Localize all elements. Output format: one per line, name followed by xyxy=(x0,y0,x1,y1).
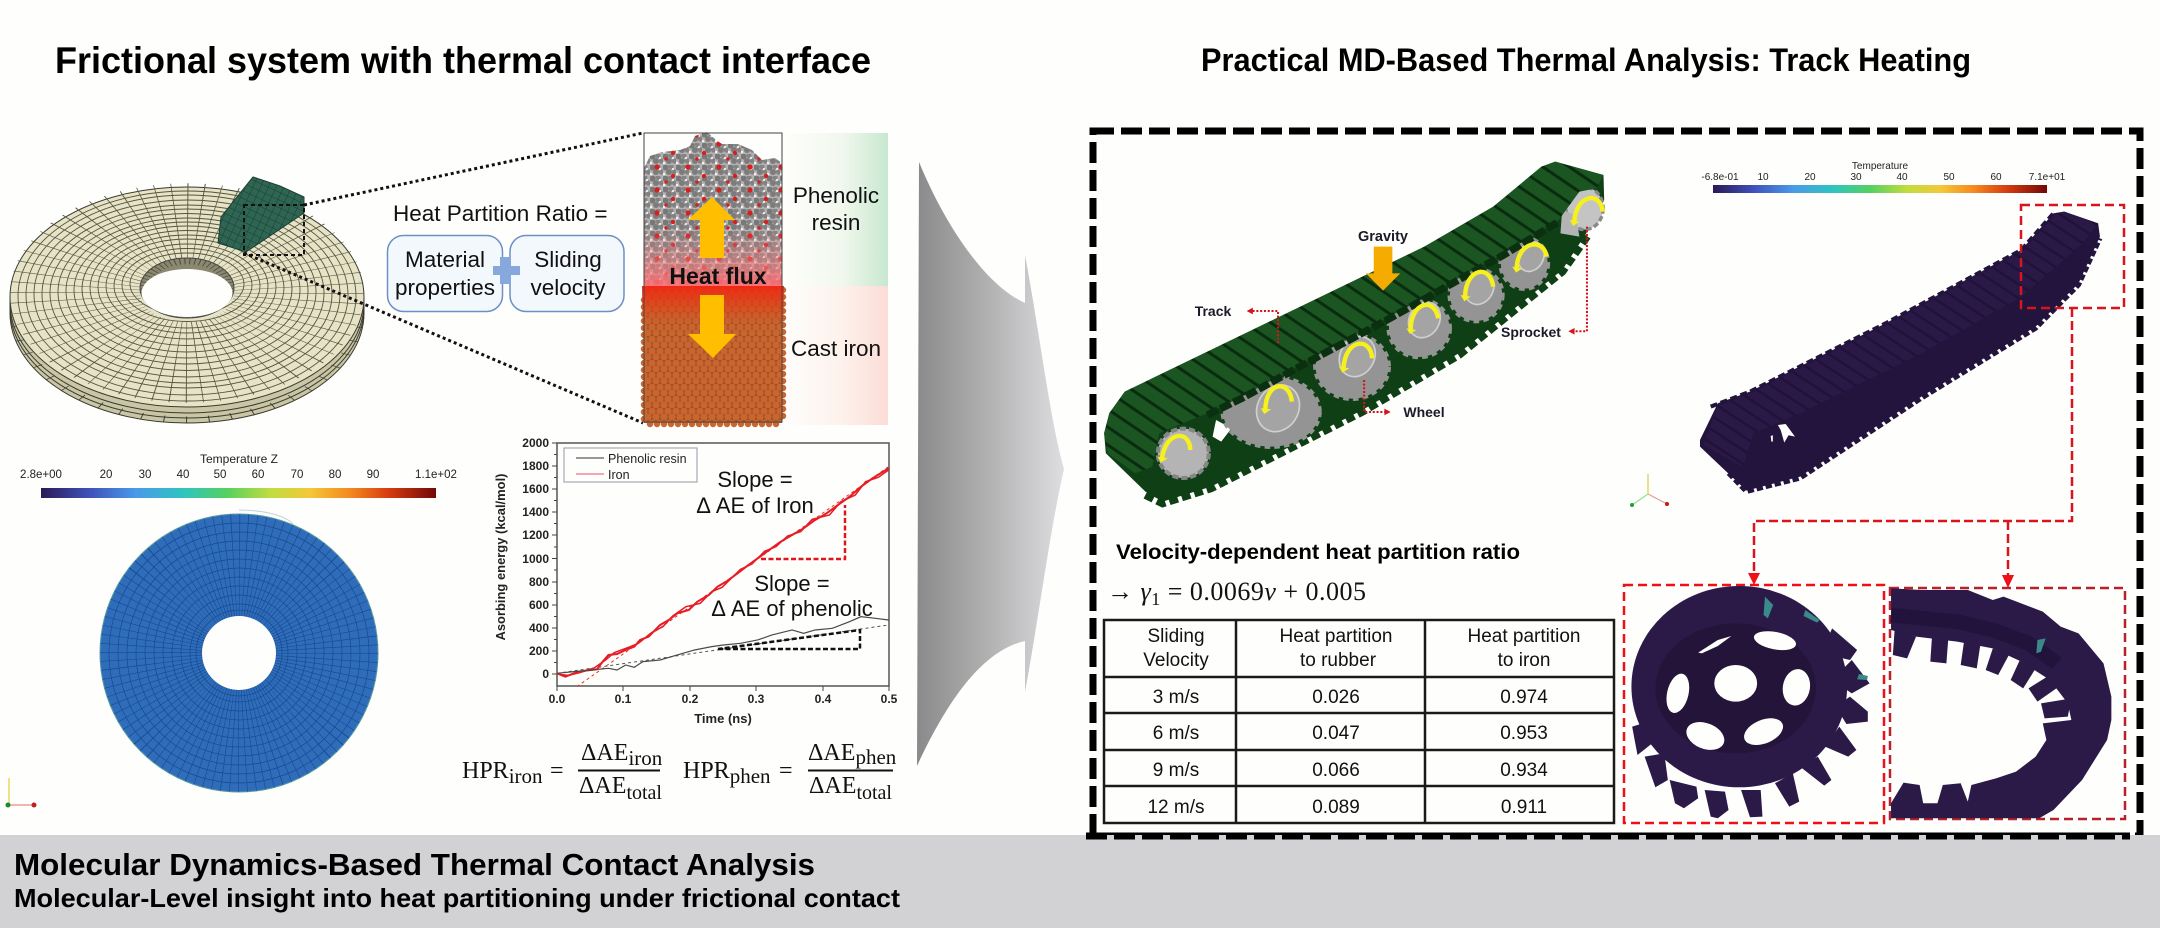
temperature colour bar: 30 xyxy=(1850,172,1862,183)
row: 9 m/s xyxy=(1153,760,1548,781)
y axis labels: 0 xyxy=(542,667,549,681)
panel: track CAD model xyxy=(1104,162,1604,503)
row: 3 m/s: 0.026 xyxy=(1312,687,1360,708)
y axis labels: 1400 xyxy=(522,505,549,519)
heat partition ratio formula xyxy=(388,201,624,312)
colour bar: 20 xyxy=(100,469,112,481)
box: sliding velocity xyxy=(510,236,624,312)
x axis labels: 0.4 xyxy=(815,692,832,706)
panel: track temperature model xyxy=(1630,161,2124,588)
HPR iron: total xyxy=(626,782,662,804)
HPR iron: iron xyxy=(509,764,543,788)
legend: Phenolic resin xyxy=(608,452,687,466)
up arrow xyxy=(688,197,735,258)
colour bar: 90 xyxy=(367,469,379,481)
down arrow xyxy=(688,295,736,358)
HPR phen: total xyxy=(856,782,892,804)
equation: gamma: v + 0.005 xyxy=(1264,577,1366,606)
slope label: iron: Δ AE of Iron xyxy=(696,493,814,518)
y axis title: Asorbing energy (kcal/mol) xyxy=(494,474,508,640)
row: 6 m/s: 6 m/s xyxy=(1153,723,1199,744)
colour bar: 50 xyxy=(214,469,226,481)
x axis labels: 0.2 xyxy=(682,692,699,706)
y axis labels: 800 xyxy=(529,575,549,589)
panel: track detail xyxy=(1890,588,2125,819)
box: material properties: Material xyxy=(405,247,485,272)
axis triad xyxy=(1630,474,1669,507)
x axis title: Time (ns) xyxy=(694,711,752,726)
footer band xyxy=(0,835,2160,928)
row: 3 m/s xyxy=(1153,687,1548,708)
y axis ticks xyxy=(552,443,889,691)
x axis labels: 0.0 xyxy=(549,692,566,706)
dashed selection xyxy=(244,205,304,255)
y axis labels: 1000 xyxy=(522,552,549,566)
temperature colour bar: 60 xyxy=(1990,172,2002,183)
temperature colour bar: 50 xyxy=(1943,172,1955,183)
axis triad xyxy=(6,778,36,808)
red detail box xyxy=(2021,205,2124,308)
cast iron label: Cast iron xyxy=(791,336,881,361)
colour bar xyxy=(20,452,457,498)
arrow: big grey flow arrow xyxy=(917,162,1064,766)
colour bar: 30 xyxy=(139,469,151,481)
HPR phen: phen xyxy=(855,745,897,769)
curves xyxy=(557,467,889,687)
footer subheading: Molecular-Level insight into heat partitioning under frictional contact xyxy=(14,883,900,913)
HPR iron: = xyxy=(550,758,564,784)
HPR phen: = xyxy=(779,758,793,784)
colour bar: 1.1e+02 xyxy=(415,469,457,481)
y axis labels: 400 xyxy=(529,621,549,635)
track section xyxy=(1891,588,2111,818)
HPR phen: ΔAE xyxy=(808,740,855,766)
blue disk xyxy=(100,510,378,792)
header row: Sliding xyxy=(1147,626,1205,647)
gravity arrow xyxy=(1366,247,1400,291)
colour bar: 2.8e+00 xyxy=(20,469,62,481)
box: sliding velocity: velocity xyxy=(530,275,606,300)
header row: Heat partition xyxy=(1279,626,1393,647)
x axis labels: 0.3 xyxy=(748,692,765,706)
header row: to rubber xyxy=(1300,650,1377,671)
gravity label: Gravity xyxy=(1358,229,1408,245)
frame bottom edge over footer xyxy=(1086,832,2130,840)
y axis labels: 600 xyxy=(529,598,549,612)
sprockets xyxy=(1158,187,1603,478)
temperature colour bar: 40 xyxy=(1896,172,1908,183)
HPR phen: ΔAE xyxy=(809,773,856,799)
disk body xyxy=(10,187,364,423)
temperature colour bar: 10 xyxy=(1757,172,1769,183)
cast iron atoms xyxy=(642,286,784,424)
table: heat partition by velocity xyxy=(1104,620,1614,823)
row: 12 m/s xyxy=(1147,797,1547,818)
red connector arrows xyxy=(1748,308,2072,588)
heat partition ratio formula: Heat Partition Ratio = xyxy=(393,201,608,226)
HPR iron: ΔAE xyxy=(581,740,628,766)
box: material properties: properties xyxy=(395,275,495,300)
HPR iron: iron xyxy=(628,746,663,770)
panel: molecular model xyxy=(642,130,888,425)
x axis labels xyxy=(549,692,898,706)
legend xyxy=(564,448,697,482)
title: right: Practical MD-Based Thermal Analysis: Track Heating xyxy=(1201,42,1971,78)
row: 3 m/s: 3 m/s xyxy=(1153,687,1199,708)
equation: gamma: = 0.0069 xyxy=(1161,577,1264,606)
panel: temperature disk xyxy=(6,452,457,808)
equation: gamma: → γ xyxy=(1107,577,1151,606)
row: 6 m/s xyxy=(1153,723,1548,744)
temperature colour bar: Temperature xyxy=(1852,161,1909,172)
track label: Track xyxy=(1195,303,1232,319)
green wedge xyxy=(218,177,304,252)
box: sliding velocity: Sliding xyxy=(534,247,602,272)
row: 12 m/s: 0.911 xyxy=(1501,797,1547,818)
temperature colour bar xyxy=(1701,161,2066,193)
x axis labels: 0.5 xyxy=(881,692,898,706)
sprocket label: Sprocket xyxy=(1501,324,1561,340)
y axis labels: 200 xyxy=(529,644,549,658)
y axis labels xyxy=(522,436,549,681)
rotation arrows xyxy=(1162,198,1603,458)
HPR iron xyxy=(462,740,663,804)
panel: track heating dashed frame xyxy=(1093,131,2140,836)
HPR phen: HPR xyxy=(683,758,730,784)
temperature colour bar: 7.1e+01 xyxy=(2029,172,2066,183)
wheels xyxy=(1223,238,1548,447)
slope label: phenolic: Slope = xyxy=(754,571,830,596)
slope triangle: iron xyxy=(761,505,845,559)
HPR iron: HPR xyxy=(462,758,509,784)
track body xyxy=(1104,162,1604,503)
dark track xyxy=(1700,212,2100,492)
row: 6 m/s: 0.047 xyxy=(1312,723,1360,744)
temperature colour bar: 20 xyxy=(1804,172,1816,183)
phenolic label: Phenolic xyxy=(793,183,879,208)
colour bar: 80 xyxy=(329,469,341,481)
row: 6 m/s: 0.953 xyxy=(1500,723,1548,744)
row: 9 m/s: 0.066 xyxy=(1312,760,1360,781)
axes and frame xyxy=(557,443,889,686)
slope label: iron: Slope = xyxy=(717,467,793,492)
equation: gamma: 1 xyxy=(1151,589,1160,609)
phenolic resin atoms xyxy=(644,130,782,288)
model frame xyxy=(644,133,782,422)
colour bar: 60 xyxy=(252,469,264,481)
colour bar: 40 xyxy=(177,469,189,481)
legend: Iron xyxy=(608,468,630,482)
row: 9 m/s: 0.934 xyxy=(1500,760,1548,781)
row: 3 m/s: 0.974 xyxy=(1500,687,1548,708)
material colour panels xyxy=(783,133,888,425)
footer heading: Molecular Dynamics-Based Thermal Contact Analysis xyxy=(14,847,815,882)
HPR phen: phen xyxy=(730,764,771,788)
HPR iron: ΔAE xyxy=(579,773,626,799)
title: left: Frictional system with thermal contact interface xyxy=(55,40,871,81)
slope label: phenolic: Δ AE of phenolic xyxy=(711,596,873,621)
row: 12 m/s: 12 m/s xyxy=(1147,797,1205,818)
header row: to iron xyxy=(1498,650,1550,671)
header row: Heat partition xyxy=(1467,626,1581,647)
row: 12 m/s: 0.089 xyxy=(1312,797,1360,818)
gear xyxy=(1631,586,1870,818)
x axis labels: 0.1 xyxy=(615,692,632,706)
y axis labels: 2000 xyxy=(522,436,549,450)
inner teeth xyxy=(1893,630,2071,718)
heading: velocity-dependent ratio: Velocity-dependent heat partition ratio xyxy=(1116,541,1520,564)
row: 9 m/s: 9 m/s xyxy=(1153,760,1199,781)
chart: absorbing energy vs time xyxy=(494,436,898,726)
header row: Velocity xyxy=(1143,650,1209,671)
colour bar: 70 xyxy=(291,469,303,481)
slope triangle: phenolic xyxy=(718,630,860,649)
red leader lines xyxy=(1252,227,1587,412)
colour bar: Temperature Z xyxy=(200,452,278,466)
heat flux label: Heat flux xyxy=(669,263,767,289)
plus sign xyxy=(493,257,520,284)
panel: brake disk mesh with wedge xyxy=(10,133,643,423)
zoom lines to molecular model xyxy=(244,133,643,423)
top track slats xyxy=(1104,162,1603,473)
equations: heat partition ratios xyxy=(462,740,897,804)
header row xyxy=(1143,626,1581,671)
y axis labels: 1800 xyxy=(522,459,549,473)
panel: sprocket detail xyxy=(1624,585,1884,823)
box: material properties xyxy=(388,236,502,312)
y axis labels: 1600 xyxy=(522,482,549,496)
phenolic label: resin xyxy=(812,210,860,235)
wheel label: Wheel xyxy=(1403,404,1445,420)
HPR phen xyxy=(683,740,897,804)
y axis labels: 1200 xyxy=(522,528,549,542)
temperature colour bar: -6.8e-01 xyxy=(1701,172,1739,183)
